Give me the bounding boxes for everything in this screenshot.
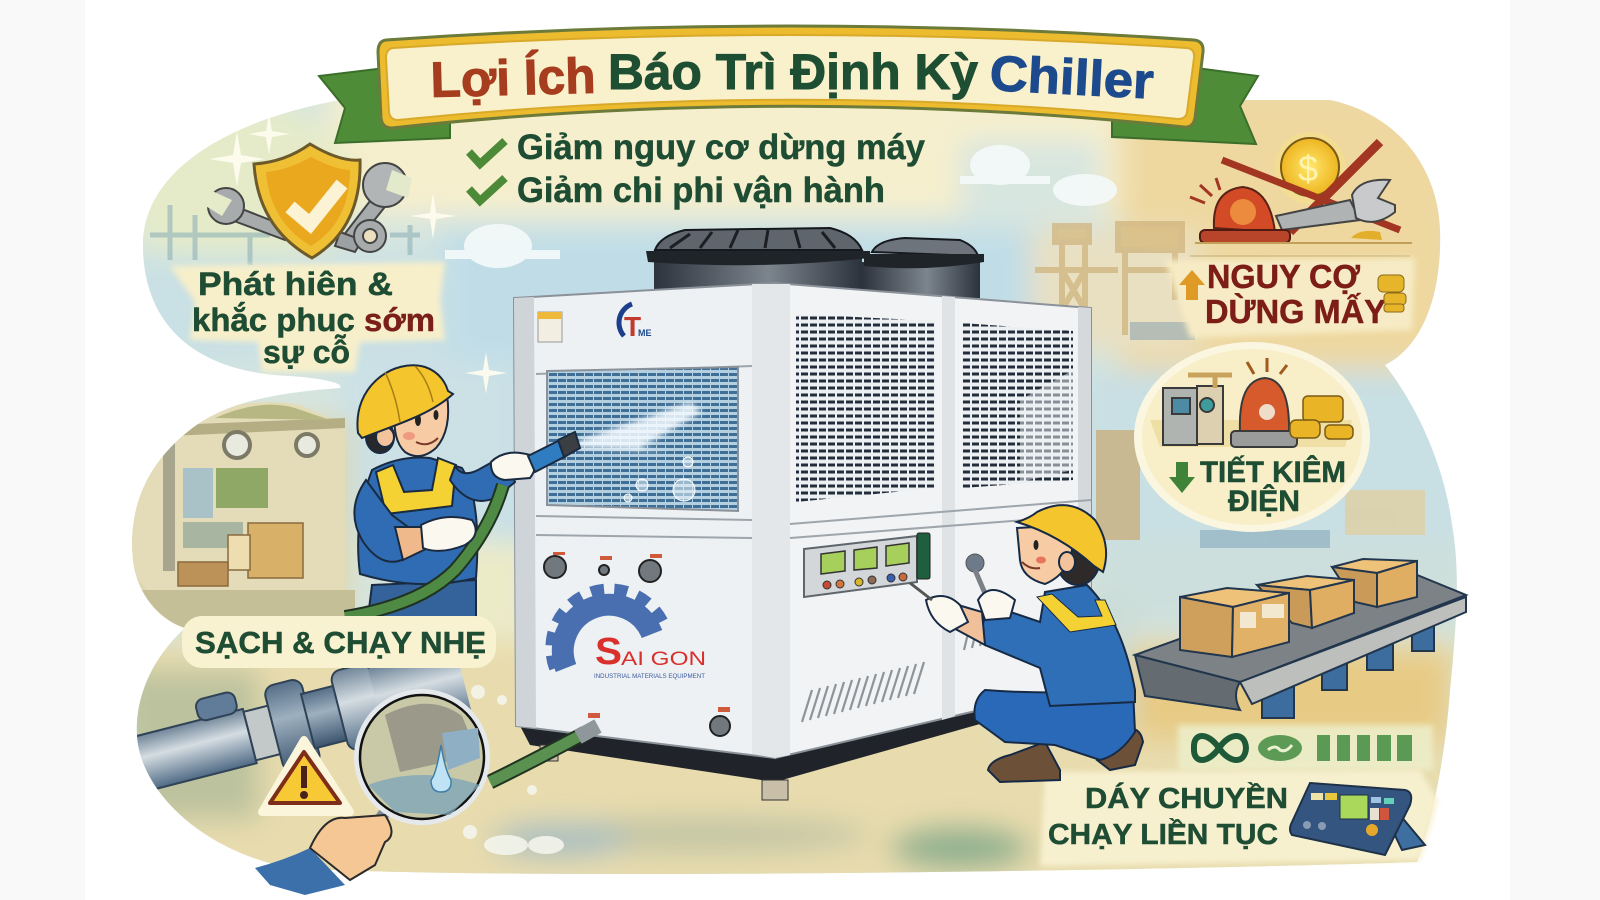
- text block: continuous production: DÁY CHUYỀN: [1085, 781, 1288, 815]
- sparkle stars: [209, 113, 507, 394]
- icon: up arrow: [1179, 270, 1205, 300]
- circle panel: energy saving: [1134, 342, 1370, 532]
- leaking pipe: [137, 668, 472, 790]
- gloves: [491, 453, 535, 480]
- torso: [978, 585, 1135, 706]
- title text: Lợi Ích: [430, 48, 596, 108]
- clouds: [445, 145, 1117, 268]
- text block: detect and fix early: khắc phuc sớm: [192, 302, 435, 338]
- foam bubbles on ground: [463, 685, 564, 855]
- fans: [646, 228, 984, 298]
- key benefits checklist: Giảm nguy cơ dừng máy: [517, 128, 926, 167]
- title ribbon: [319, 26, 1258, 144]
- box: [1180, 588, 1289, 657]
- text block: downtime risk: DỪNG MẤY: [1205, 293, 1386, 330]
- gloves and tool: [948, 605, 985, 645]
- nozzle: [528, 432, 580, 472]
- wrench handle: [966, 554, 990, 605]
- box: [1332, 559, 1417, 607]
- conveyor belt: [1135, 570, 1466, 682]
- text block: continuous production: [1040, 770, 1438, 866]
- conveyor with boxes: [1135, 559, 1466, 718]
- icon: check: [469, 141, 505, 164]
- logo: T mark: ME: [638, 328, 652, 338]
- icon: check: [469, 178, 505, 201]
- frame posts: [514, 284, 1091, 758]
- left warehouse vignette: [125, 402, 355, 630]
- illustrated background scene: [132, 100, 1457, 874]
- logo: T mark: [619, 304, 652, 342]
- head: [366, 421, 394, 453]
- worker cleaning coil: [345, 365, 580, 617]
- louvers: [802, 617, 1002, 722]
- ribbon tails: [319, 68, 1258, 144]
- label: clean and run light: SẠCH & CHẠY NHẸ: [195, 625, 486, 660]
- icon: warning triangle: [262, 740, 350, 812]
- side face: [775, 283, 1091, 758]
- warning sticker: [538, 312, 562, 342]
- icon: siren, coin and wrench crossed out: $: [1298, 148, 1318, 189]
- icon: magnifier with leak: [357, 692, 487, 838]
- faded factory right: [1035, 224, 1425, 548]
- faded factory left: [150, 205, 420, 265]
- icon: siren, coin and wrench crossed out: [1190, 132, 1412, 256]
- logo: Sai Gon gear: [552, 590, 706, 680]
- conveyor legs: [1262, 617, 1434, 718]
- clocks: [224, 432, 318, 458]
- title text: Chiller: [988, 45, 1155, 110]
- continuous status icons: [1178, 725, 1433, 770]
- ribbon plaque: [378, 26, 1203, 128]
- title text: Báo Trì Định Kỳ: [608, 44, 978, 100]
- base and feet: [518, 672, 1100, 782]
- icon: shield with wrenches: [204, 144, 412, 258]
- boots: [988, 742, 1060, 782]
- crates: [178, 523, 303, 586]
- overalls: [974, 690, 1135, 760]
- valves: [544, 556, 730, 736]
- control panel: [804, 533, 930, 597]
- green hose to chiller: [490, 726, 598, 782]
- circle panel: energy saving: TIẾT KIÊM: [1200, 455, 1346, 489]
- icon: small coin stack: [1378, 275, 1406, 312]
- yoke: [1037, 594, 1116, 632]
- front face: [514, 283, 775, 758]
- key benefits checklist: [469, 128, 926, 210]
- chiller unit: [514, 228, 1100, 800]
- icon: down arrow: [1169, 462, 1195, 493]
- text block: downtime risk: NGUY CỢ: [1207, 258, 1361, 295]
- status bars: [1317, 735, 1412, 761]
- text block: detect and fix early: sự cỗ: [263, 334, 350, 370]
- mini chiller and siren: [1163, 375, 1297, 447]
- key benefits checklist: Giảm chi phi vận hành: [517, 171, 885, 210]
- text block: continuous production: CHẠY LIỀN TỤC: [1048, 817, 1278, 851]
- text block: downtime risk: [1165, 258, 1415, 338]
- hand holding magnifier: [255, 815, 392, 895]
- logo: Sai Gon gear: INDUSTRIAL MATERIALS EQUIPMENT: [594, 673, 705, 680]
- text block: detect and fix early: [170, 262, 445, 372]
- circle panel: energy saving: ĐIỆN: [1228, 484, 1300, 518]
- head: [1056, 531, 1100, 585]
- worker at control panel: [910, 505, 1143, 782]
- icon: green oval: [1258, 735, 1302, 761]
- clean coil window: [547, 367, 738, 511]
- logo: Sai Gon gear: AI GON: [621, 649, 706, 670]
- icon: infinity: [1194, 736, 1246, 760]
- helmet: [357, 365, 453, 438]
- logo: T mark: T: [624, 311, 641, 342]
- box: [1257, 576, 1354, 628]
- condenser grilles: [796, 314, 1073, 502]
- logo: Sai Gon gear: S: [595, 631, 622, 673]
- label: clean and run light: [182, 616, 496, 668]
- hose: [345, 485, 503, 617]
- text block: detect and fix early: Phát hiên &: [198, 266, 393, 302]
- title text: [430, 44, 1155, 110]
- helmet: [1017, 505, 1106, 572]
- icon: control tablet: [1290, 783, 1425, 855]
